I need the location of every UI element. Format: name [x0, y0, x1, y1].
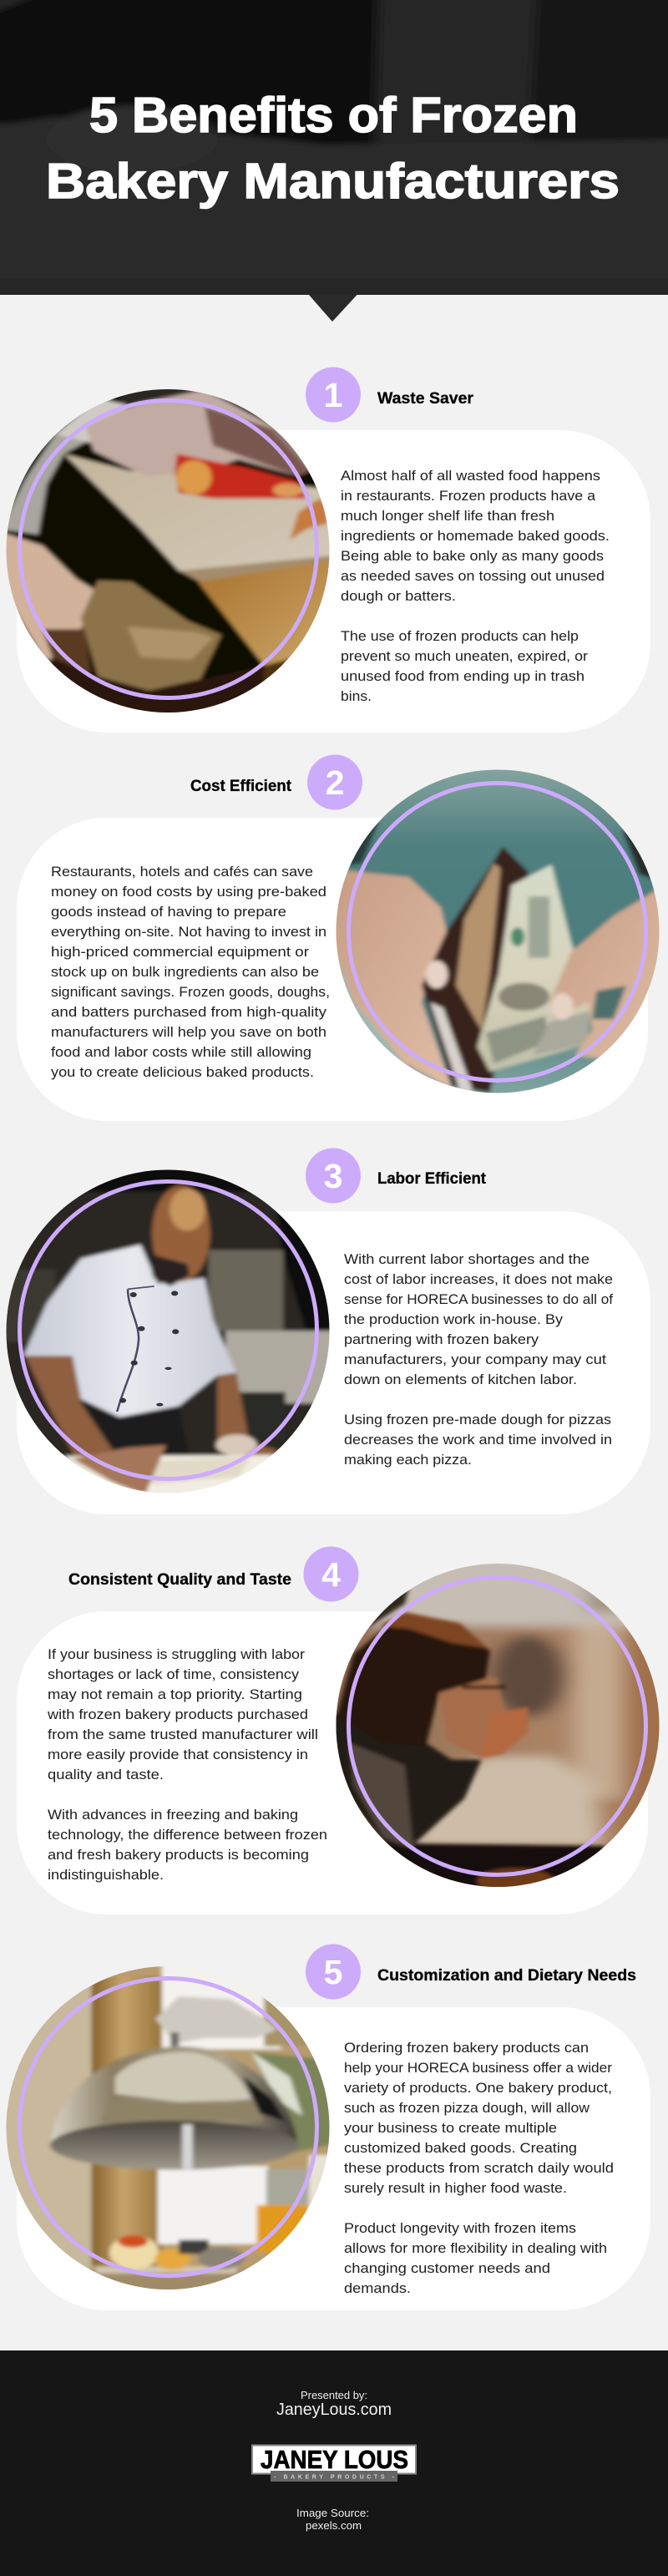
number badge 2: 2 — [326, 763, 344, 802]
heading: Consistent Quality and Taste — [68, 1571, 291, 1589]
header pointer triangle — [309, 295, 357, 322]
body text: everything on-site. Not having to invest in — [51, 924, 326, 940]
photo: silver cloche lifted — [7, 1966, 329, 2289]
body text: decreases the work and time involved in — [344, 1432, 612, 1448]
heading: Customization and Dietary Needs — [377, 1967, 636, 1985]
card — [17, 430, 650, 733]
footer — [0, 2350, 668, 2576]
body text: in restaurants. Frozen products have a — [341, 488, 596, 504]
photo ring — [20, 401, 317, 698]
body text: more easily provide that consistency in — [48, 1747, 308, 1762]
body text: Almost half of all wasted food happens — [341, 468, 600, 484]
photo: hands opening wallet — [336, 770, 660, 1093]
photo ring — [349, 783, 646, 1081]
body text — [51, 864, 330, 1080]
panel: benefit 2 Cost Efficient — [17, 755, 668, 1121]
photo details: jacket buttons and piping — [117, 1286, 179, 1412]
title: 5 Benefits of Frozen — [89, 88, 578, 143]
image source — [296, 2507, 369, 2532]
body text: high-priced commercial equipment or — [51, 944, 309, 960]
body text: these products from scratch daily would — [344, 2160, 614, 2176]
heading: Cost Efficient — [190, 778, 292, 795]
number badge 2 — [307, 755, 362, 810]
body text — [341, 468, 610, 704]
body text: goods instead of having to prepare — [51, 904, 286, 920]
body text: dough or batters. — [341, 588, 456, 604]
body text: demands. — [344, 2280, 411, 2296]
image source: Image Source: — [296, 2507, 369, 2519]
photo: woman tasting food — [336, 1564, 660, 1887]
body text: may not remain a top priority. Starting — [48, 1686, 302, 1702]
body text: Restaurants, hotels and cafés can save — [51, 864, 313, 880]
number badge 1 — [306, 368, 361, 423]
photo: hands chopping peppers — [7, 389, 329, 712]
card — [17, 2007, 650, 2310]
panel: benefit 3 Labor Efficient — [0, 1148, 650, 1514]
number badge 1: 1 — [324, 376, 342, 414]
photo: chef rolling dough — [7, 1169, 329, 1493]
card — [17, 1211, 650, 1514]
body text: help your HORECA business offer a wider — [344, 2060, 612, 2076]
body text: cost of labor increases, it does not make — [344, 1271, 613, 1287]
header background photo — [0, 0, 668, 307]
body text: customized baked goods. Creating — [344, 2140, 577, 2156]
photo ring — [20, 1181, 317, 1478]
panel: benefit 4 Consistent Quality and Taste — [17, 1537, 668, 1914]
presented by: JaneyLous.com — [276, 2401, 392, 2419]
body text: unused food from ending up in trash — [341, 668, 584, 684]
body text: food and labor costs while still allowing — [51, 1044, 311, 1060]
number badge 4: 4 — [321, 1555, 341, 1594]
body text — [47, 1646, 327, 1883]
body text: With advances in freezing and baking — [48, 1807, 298, 1823]
body text: indistinguishable. — [48, 1867, 164, 1883]
heading: Labor Efficient — [377, 1170, 487, 1188]
presented by: Presented by: — [301, 2389, 367, 2401]
body text: from the same trusted manufacturer will — [48, 1727, 318, 1742]
body text: the production work in-house. By — [344, 1311, 564, 1327]
body text: allows for more flexibility in dealing with — [344, 2240, 607, 2256]
card — [17, 1611, 648, 1914]
body text: and fresh bakery products is becoming — [48, 1847, 309, 1863]
body text: shortages or lack of time, consistency — [48, 1666, 300, 1682]
body text: ingredients or homemade baked goods. — [341, 528, 610, 544]
body text: Ordering frozen bakery products can — [344, 2040, 589, 2056]
body text: variety of products. One bakery product, — [344, 2080, 612, 2096]
body text: you to create delicious baked products. — [51, 1064, 314, 1080]
body text: making each pizza. — [344, 1452, 472, 1468]
body text: prevent so much uneaten, expired, or — [341, 648, 588, 664]
title — [46, 88, 620, 209]
body text: partnering with frozen bakery — [344, 1331, 539, 1347]
body text: as needed saves on tossing out unused — [341, 568, 605, 584]
body text: manufacturers, your company may cut — [344, 1351, 606, 1367]
presented by — [276, 2389, 392, 2419]
body text: technology, the difference between frozen — [48, 1827, 327, 1843]
body text: The use of frozen products can help — [341, 628, 579, 644]
body text: Being able to bake only as many goods — [341, 548, 604, 564]
card — [17, 818, 648, 1121]
body text: quality and taste. — [48, 1767, 164, 1782]
body text: surely result in higher food waste. — [344, 2180, 567, 2196]
body text: down on elements of kitchen labor. — [344, 1372, 577, 1387]
photo ring — [349, 1577, 646, 1874]
image source: pexels.com — [306, 2519, 362, 2532]
body text — [344, 1251, 613, 1468]
panel: benefit 5 Customization and Dietary Needs — [0, 1945, 650, 2310]
number badge 5: 5 — [324, 1953, 342, 1991]
body text: money on food costs by using pre-baked — [51, 884, 326, 900]
footer background — [0, 2350, 668, 2576]
body text: Using frozen pre-made dough for pizzas — [344, 1412, 611, 1427]
body text: stock up on bulk ingredients can also be — [51, 964, 319, 980]
panel: benefit 1 Waste Saver — [0, 368, 650, 733]
body text: Product longevity with frozen items — [344, 2220, 576, 2236]
body text: sense for HORECA businesses to do all of — [344, 1291, 613, 1307]
body text: your business to create multiple — [344, 2120, 557, 2136]
header banner — [0, 0, 668, 322]
number badge 4 — [304, 1547, 359, 1602]
body text — [344, 2040, 614, 2296]
body text: bins. — [341, 688, 372, 704]
body text: much longer shelf life than fresh — [341, 508, 554, 524]
body text: changing customer needs and — [344, 2260, 550, 2276]
number badge 5 — [306, 1945, 361, 2000]
heading: Waste Saver — [377, 390, 474, 408]
number badge 3: 3 — [324, 1157, 342, 1195]
body text: manufacturers will help you save on both — [51, 1024, 326, 1040]
body text: such as frozen pizza dough, will allow — [344, 2100, 590, 2116]
body text: significant savings. Frozen goods, doughs, — [51, 984, 330, 1000]
title: Bakery Manufacturers — [46, 154, 620, 209]
logo: Janey Lous Bakery Products: - BAKERY PRODUCTS - — [274, 2474, 395, 2481]
logo: Janey Lous Bakery Products: JANEY LOUS — [261, 2445, 408, 2474]
body text: If your business is struggling with labor — [48, 1646, 305, 1662]
number badge 3 — [306, 1148, 361, 1203]
body text: With current labor shortages and the — [344, 1251, 590, 1267]
photo ring — [20, 1978, 317, 2275]
body text: with frozen bakery products purchased — [47, 1706, 308, 1722]
body text: and batters purchased from high-quality — [51, 1004, 327, 1020]
